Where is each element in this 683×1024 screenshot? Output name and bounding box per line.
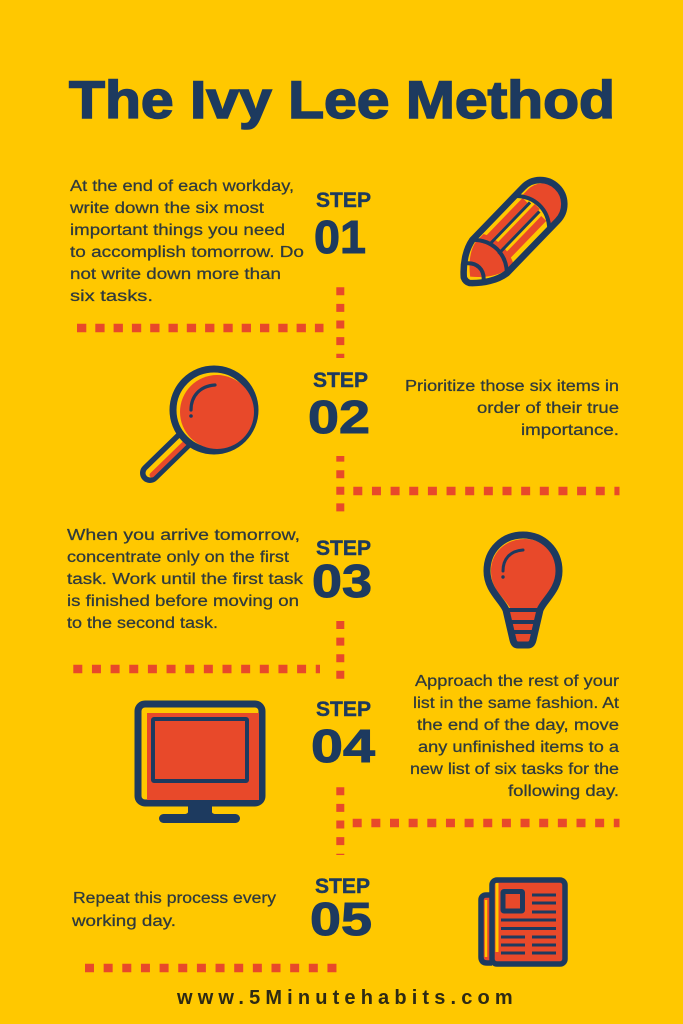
step 4 text: Approach the rest of your <box>415 673 619 690</box>
step 1 text: six tasks. <box>70 288 153 305</box>
step 5 label: 05 <box>310 893 372 945</box>
step 4 text <box>410 673 620 800</box>
icon: computer monitor <box>138 704 262 823</box>
step 3 text: concentrate only on the first <box>67 549 290 566</box>
title: The Ivy Lee Method <box>69 71 615 130</box>
step 5 text: Repeat this process every <box>73 890 276 907</box>
icon: magnifying glass <box>150 369 255 475</box>
step 3 label: 03 <box>312 555 372 607</box>
step 2 label: STEP <box>313 369 368 392</box>
step 1 text <box>69 178 304 305</box>
step 1 text: write down the six most <box>69 200 265 217</box>
step 1 text: not write down more than <box>70 266 281 283</box>
step 3 label: STEP <box>316 537 371 560</box>
step 1 text: important things you need <box>70 222 285 239</box>
step 2 text: order of their true <box>477 400 619 417</box>
step 5 text <box>71 890 276 930</box>
step 4 label: STEP <box>316 698 371 721</box>
step 4 connector <box>340 787 620 855</box>
step 1 text: At the end of each workday, <box>70 178 294 195</box>
step 4 text: the end of the day, move <box>417 717 619 734</box>
step 2 label: 02 <box>308 391 370 443</box>
step 3 text: is finished before moving on <box>67 593 299 610</box>
step 2 text: Prioritize those six items in <box>405 378 619 395</box>
step 1 label: 01 <box>314 211 366 263</box>
step 4 text: following day. <box>508 783 619 800</box>
step 2 label <box>308 369 370 443</box>
icon: pencil <box>449 170 574 298</box>
step 1 label: STEP <box>316 189 371 212</box>
step 3 label <box>312 537 372 607</box>
step 3 text: to the second task. <box>67 615 218 632</box>
step 2 connector <box>340 456 620 513</box>
step 3 text <box>67 527 303 632</box>
step 4 text: list in the same fashion. At <box>413 695 620 712</box>
step 2 text: importance. <box>521 422 619 439</box>
step 5 label: STEP <box>315 875 370 898</box>
footer website: www.5Minutehabits.com <box>176 987 518 1009</box>
icon: light bulb <box>487 535 559 645</box>
step 2 text <box>405 378 619 439</box>
step 4 text: any unfinished items to a <box>418 739 619 756</box>
step 1 connector <box>77 287 340 358</box>
icon: newspaper <box>481 880 565 964</box>
step 5 connector <box>85 964 340 972</box>
step 3 connector <box>73 621 340 680</box>
step 4 label <box>311 698 376 772</box>
step 5 label <box>310 875 372 945</box>
step 4 label: 04 <box>311 720 376 772</box>
step 4 text: new list of six tasks for the <box>410 761 619 778</box>
step 1 text: to accomplish tomorrow. Do <box>70 244 304 261</box>
step 3 text: task. Work until the first task <box>67 571 303 588</box>
step 3 text: When you arrive tomorrow, <box>67 527 300 544</box>
step 1 label <box>314 189 371 263</box>
step 5 text: working day. <box>71 913 176 930</box>
